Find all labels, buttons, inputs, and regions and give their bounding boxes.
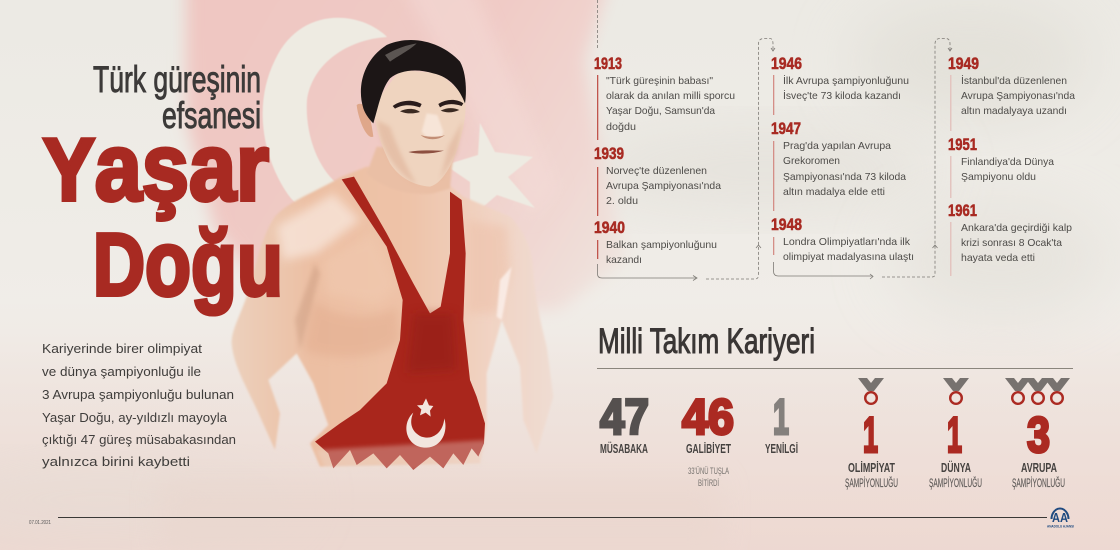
- event 1946: İsveç'te 73 kiloda kazandı: [783, 89, 901, 102]
- wrestler portrait: [232, 40, 553, 473]
- timeline column 2: [771, 55, 914, 263]
- flag crescent: [263, 18, 387, 232]
- nose shadow: [421, 135, 445, 139]
- flag background: [186, 0, 625, 320]
- event 1946: [771, 55, 909, 115]
- stat: olympic championship: 1: [863, 407, 878, 463]
- cheek shade: [377, 120, 417, 185]
- event 1946: İlk Avrupa şampiyonluğunu: [783, 74, 909, 87]
- stat: european championship: [1005, 378, 1070, 490]
- name: [43, 114, 283, 315]
- intro paragraph: ve dünya şampiyonluğu ile: [42, 365, 201, 379]
- event 1939: Avrupa Şampiyonası'nda: [606, 181, 721, 192]
- event 1939: 1939: [594, 145, 624, 163]
- event 1940: 1940: [594, 219, 625, 237]
- event 1939: 2. oldu: [606, 196, 638, 207]
- event 1947: Prag'da yapılan Avrupa: [783, 141, 891, 152]
- nose: [422, 113, 443, 137]
- logo: Anadolu Agency: ANADOLU AJANSI: [1047, 524, 1074, 528]
- flag wave highlight: [400, 0, 560, 220]
- stat: world championship: ŞAMPİYONLUĞU: [929, 475, 982, 490]
- stat: wins: BİTİRDİ: [698, 478, 719, 488]
- event 1948: [771, 216, 914, 263]
- stat: losses: 1: [773, 389, 789, 445]
- event 1940: kazandı: [606, 255, 642, 266]
- stat: wins: 33'ÜNÜ TUŞLA: [688, 466, 729, 476]
- stat: olympic championship: [845, 378, 898, 490]
- title: [43, 59, 283, 315]
- event 1961: 1961: [948, 202, 977, 220]
- left brow: [393, 101, 422, 109]
- icon: three medals: [1005, 378, 1070, 404]
- subtitle: [93, 59, 261, 136]
- logo: Anadolu Agency: [1047, 509, 1074, 528]
- event 1948: 1948: [771, 216, 802, 234]
- hair: [361, 40, 466, 123]
- event 1913: "Türk güreşinin babası": [606, 76, 713, 87]
- left eye: [400, 109, 420, 113]
- event 1961: hayata veda etti: [961, 253, 1035, 264]
- chest shading: [303, 300, 400, 357]
- event 1913: doğdu: [606, 122, 636, 133]
- event 1947: 1947: [771, 120, 801, 138]
- intro paragraph: [42, 342, 236, 469]
- event 1948: olimpiyat madalyasına ulaştı: [783, 252, 914, 263]
- singlet frayed edge: [317, 440, 487, 473]
- subtitle: efsanesi: [162, 95, 261, 136]
- event 1949: İstanbul'da düzenlenen: [961, 74, 1067, 87]
- date: 07.01.2021: [29, 520, 51, 526]
- event 1949: 1949: [948, 55, 979, 73]
- event 1947: Şampiyonası'nda 73 kiloda: [783, 172, 906, 183]
- event 1949: Avrupa Şampiyonası'nda: [961, 91, 1075, 102]
- subtitle: Türk güreşinin: [93, 59, 261, 100]
- right arm crease: [497, 267, 512, 320]
- stat: world championship: [929, 378, 982, 490]
- event 1951: Finlandiya'da Dünya: [961, 157, 1054, 168]
- right brow: [438, 100, 463, 107]
- flag star: [445, 123, 535, 218]
- stat: olympic championship: OLİMPİYAT: [848, 460, 895, 475]
- event 1940: [594, 219, 717, 266]
- torso and arms: [232, 167, 553, 467]
- right cheek shade: [440, 120, 463, 180]
- intro paragraph: Yaşar Doğu, ay-yıldızlı mayoyla: [42, 411, 227, 425]
- stat: world championship: DÜNYA: [941, 460, 971, 475]
- stat: losses: YENİLGİ: [765, 441, 798, 456]
- footer: [29, 509, 1074, 528]
- flag red field: [186, 0, 625, 320]
- arm shadow: [295, 263, 320, 350]
- right eye: [441, 108, 459, 112]
- event 1947: [771, 120, 906, 211]
- stat: european championship: ŞAMPİYONLUĞU: [1012, 475, 1065, 490]
- name: Yaşar: [43, 114, 269, 221]
- event 1940: Balkan şampiyonluğunu: [606, 240, 717, 251]
- chest highlight: [323, 233, 397, 303]
- right chest: [467, 220, 510, 313]
- mouth: [408, 150, 444, 154]
- intro paragraph: çıktığı 47 güreş müsabakasından: [42, 433, 236, 447]
- hair shine: [385, 43, 417, 62]
- event 1947: altın madalya elde etti: [783, 187, 885, 198]
- singlet: [315, 177, 485, 470]
- event 1949: altın madalyaya uzandı: [961, 106, 1067, 117]
- icon: medal: [858, 378, 884, 404]
- timeline column 3: [948, 55, 1075, 276]
- event 1913: 1913: [594, 55, 622, 73]
- name: Doğu: [93, 213, 283, 315]
- stat: matches: MÜSABAKA: [600, 441, 648, 456]
- stat: matches: 47: [600, 389, 649, 445]
- singlet darker centre: [407, 313, 457, 373]
- event 1939: [594, 145, 721, 216]
- timeline connector arrows: [598, 0, 952, 280]
- event 1947: Grekoromen: [783, 156, 840, 167]
- event 1913: [594, 55, 735, 140]
- stat: olympic championship: ŞAMPİYONLUĞU: [845, 475, 898, 490]
- intro paragraph: Kariyerinde birer olimpiyat: [42, 342, 203, 356]
- intro paragraph: yalnızca birini kaybetti: [42, 455, 190, 469]
- event 1951: [948, 136, 1054, 198]
- section heading: national team career: Milli Takım Kariyeri: [598, 322, 815, 361]
- intro paragraph: 3 Avrupa şampiyonluğu bulunan: [42, 388, 234, 402]
- shoulder highlight: [277, 193, 360, 260]
- event 1951: Şampiyonu oldu: [961, 172, 1036, 183]
- timeline column 1: [594, 55, 735, 266]
- stat: world championship: 1: [947, 407, 962, 463]
- event 1913: olarak da anılan milli sporcu: [606, 91, 735, 102]
- icon: medal: [943, 378, 969, 404]
- stat: wins: [682, 389, 734, 488]
- stat: wins: GALİBİYET: [686, 441, 731, 456]
- event 1948: Londra Olimpiyatları'nda ilk: [783, 237, 911, 248]
- event 1961: Ankara'da geçirdiği kalp: [961, 223, 1072, 234]
- event 1961: [948, 202, 1072, 276]
- stat: european championship: AVRUPA: [1021, 460, 1057, 475]
- stat: european championship: 3: [1027, 407, 1050, 463]
- logo: Anadolu Agency: AA: [1052, 510, 1069, 525]
- event 1949: [948, 55, 1075, 131]
- event 1913: Yaşar Doğu, Samsun'da: [606, 106, 715, 117]
- neck: [367, 147, 453, 194]
- stat: losses: [765, 389, 798, 456]
- event 1961: krizi sonrası 8 Ocak'ta: [961, 238, 1062, 249]
- ear: [357, 104, 373, 137]
- stat: wins: 46: [682, 389, 734, 445]
- event 1946: 1946: [771, 55, 802, 73]
- event 1939: Norveç'te düzenlenen: [606, 166, 707, 177]
- face: [375, 70, 466, 187]
- singlet star: [417, 398, 433, 417]
- singlet crescent: [406, 413, 445, 448]
- event 1951: 1951: [948, 136, 977, 154]
